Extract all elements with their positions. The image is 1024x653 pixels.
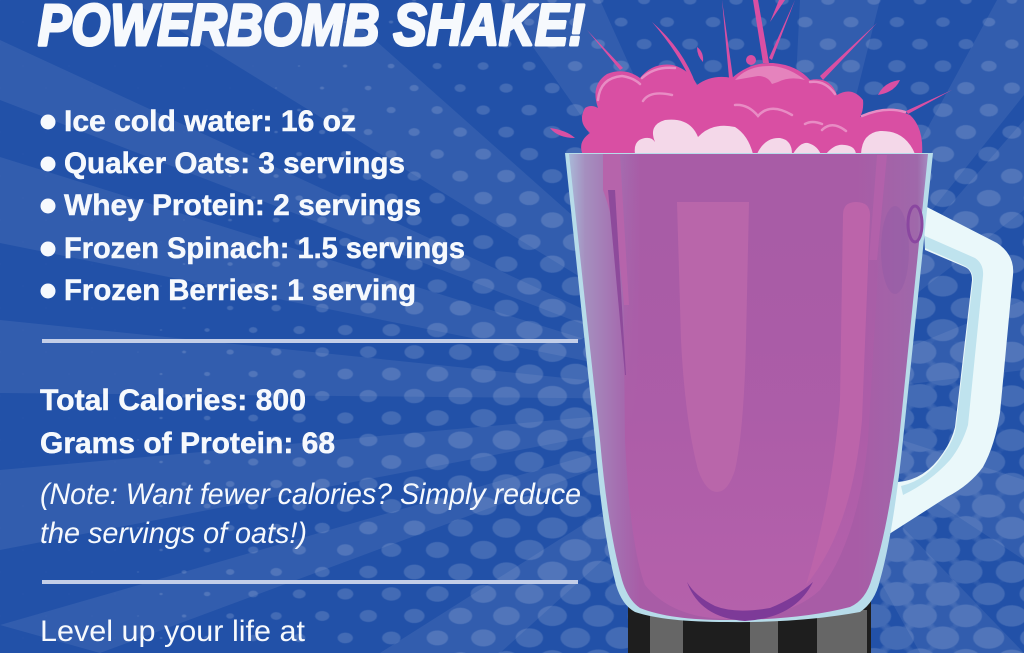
nutrition totals: Total Calories: 800 [40,384,306,417]
glass jar outline [565,153,933,622]
nutrition totals [40,384,335,460]
blender base [628,600,871,653]
ingredient: spinach: Frozen Spinach: 1.5 servings [64,232,465,265]
foam highlights [598,68,905,131]
pink splash spikes [550,0,952,138]
top foam cap [735,66,805,84]
ingredient: water: Ice cold water: 16 oz [64,105,356,138]
note [40,478,581,550]
ingredient: oats: Quaker Oats: 3 servings [64,147,405,180]
ingredient: berries: Frozen Berries: 1 serving [64,274,416,307]
call to action: Level up your life at [40,615,306,648]
ingredient: whey: Whey Protein: 2 servings [64,189,421,222]
bottom crescent [687,582,813,621]
handle [883,205,1013,538]
handle joint shadow [881,206,922,294]
jar contents [569,154,928,620]
blender [550,0,1013,653]
note: (Note: Want fewer calories? Simply reduce [40,478,581,511]
lower liquid glow [622,154,885,619]
nutrition totals: Grams of Protein: 68 [40,427,335,460]
right rim strip [869,155,887,260]
left highlight strip [603,154,629,305]
pink foam [581,63,922,155]
left dark streak [608,190,626,375]
note: the servings of oats!) [40,517,307,550]
white foam [635,120,915,155]
center highlight [677,202,749,492]
ingredient list [40,105,465,307]
right highlight [806,202,870,585]
